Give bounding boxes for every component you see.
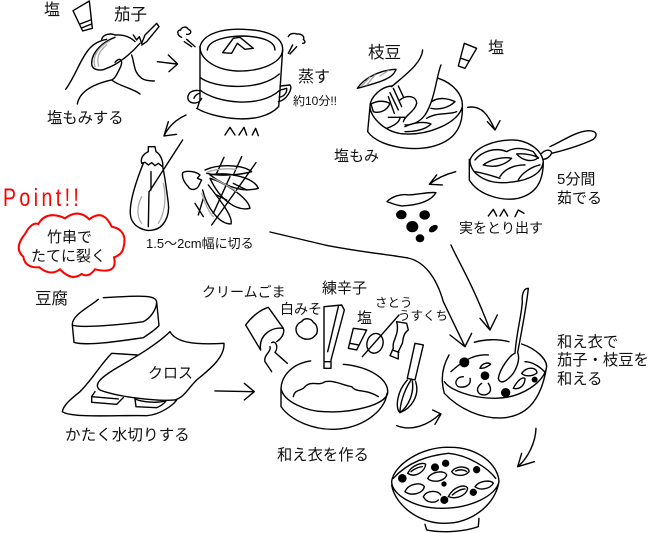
icon: finished serving bowl	[392, 447, 499, 532]
icon: mustard tube	[324, 305, 344, 368]
caption: make dressing: 和え衣を作る	[277, 447, 369, 464]
arrow: to cutting	[164, 115, 186, 136]
label: about 10 minutes: 約10分!!	[293, 93, 337, 108]
icon: steam	[178, 27, 305, 54]
step: steamer	[178, 27, 337, 136]
label: mustard: 練辛子	[322, 280, 367, 297]
arrow: to serving bowl	[518, 428, 536, 467]
step: cut eggplant	[130, 140, 258, 251]
label: 5 minutes: 5分間	[557, 171, 595, 188]
caption: cut width: 1.5〜2cm幅に切る	[146, 236, 254, 251]
icon: whisk	[397, 343, 423, 413]
step: drain tofu	[35, 289, 224, 444]
arrow: to dressing	[215, 383, 254, 400]
label: light soy sauce: うすくち	[398, 309, 448, 323]
callout: point	[3, 184, 124, 277]
arrow: eggplant to mixing bowl	[270, 232, 472, 347]
label: cream sesame: クリームごま	[202, 284, 286, 300]
icon: salt packet	[348, 328, 367, 350]
icon: empty pod	[387, 192, 436, 206]
arrow: to steamer	[157, 55, 178, 72]
icon: tofu block	[72, 296, 159, 344]
icon: beans	[396, 210, 439, 242]
label: sugar: さとう	[375, 296, 413, 310]
label: boil: 茹でる	[557, 190, 602, 207]
icon: flames	[225, 127, 258, 136]
icon: whole eggplant with skewer	[130, 140, 183, 230]
label: mix instruction line 3: 和える	[557, 371, 602, 388]
heading: Point!!: Point!!	[3, 184, 82, 212]
step: salt-rub edamame	[334, 39, 504, 165]
label: mix instruction line 2: 茄子・枝豆を	[557, 352, 649, 369]
icon: soy sauce bottle	[390, 322, 408, 359]
label: white miso: 白みそ	[280, 301, 322, 317]
bubble text: 竹串で	[47, 229, 92, 246]
step: make dressing	[202, 280, 448, 464]
step: shelled beans	[387, 192, 543, 242]
arrow: to pan	[468, 107, 500, 130]
icon: bowl with hand	[368, 50, 462, 149]
icon: salt packet	[458, 43, 477, 68]
caption: drain well: かたく水切りする	[65, 426, 190, 444]
icon: sliced eggplant	[182, 157, 258, 225]
icon: flames	[488, 209, 524, 217]
icon: dressing bowl	[281, 361, 388, 429]
icon: sesame cream cup	[246, 307, 287, 372]
arrow: dressing to mixing bowl	[397, 410, 441, 428]
caption: rub with salt: 塩もみする	[47, 110, 124, 127]
arrow: to beans	[429, 172, 456, 185]
step: salt-rub eggplant	[44, 1, 159, 127]
icon: white miso	[296, 319, 317, 339]
icon: mixing bowl with spoon	[442, 288, 547, 418]
label: mix instruction: 和え衣で	[557, 334, 618, 351]
icon: saucepan	[469, 131, 596, 199]
icon: hands rubbing eggplant	[66, 23, 159, 104]
arrow: beans to mixing bowl	[451, 245, 497, 330]
label: salt: 塩	[44, 1, 60, 19]
label: steam: 蒸す	[298, 68, 330, 86]
label: salt: 塩	[488, 39, 504, 57]
icon: edamame pod	[357, 69, 396, 88]
speech bubble	[19, 214, 124, 277]
icon: steamer pot	[188, 29, 291, 119]
label: tofu: 豆腐	[35, 289, 68, 308]
icon: salt packet	[73, 1, 92, 31]
icon: tofu wrapped in cloth	[62, 332, 224, 416]
bubble text second line: たてに裂く	[31, 248, 106, 265]
label: salt: 塩	[357, 310, 372, 327]
caption: take out beans: 実をとり出す	[459, 220, 543, 236]
icon: sugar spoon	[362, 315, 399, 357]
label: eggplant: 茄子	[114, 5, 147, 24]
step: boil edamame	[469, 131, 602, 217]
caption: salt rub: 塩もみ	[334, 148, 379, 165]
step: mix all	[442, 288, 649, 418]
label: cloth: クロス	[148, 365, 193, 382]
label: edamame: 枝豆	[368, 43, 401, 62]
